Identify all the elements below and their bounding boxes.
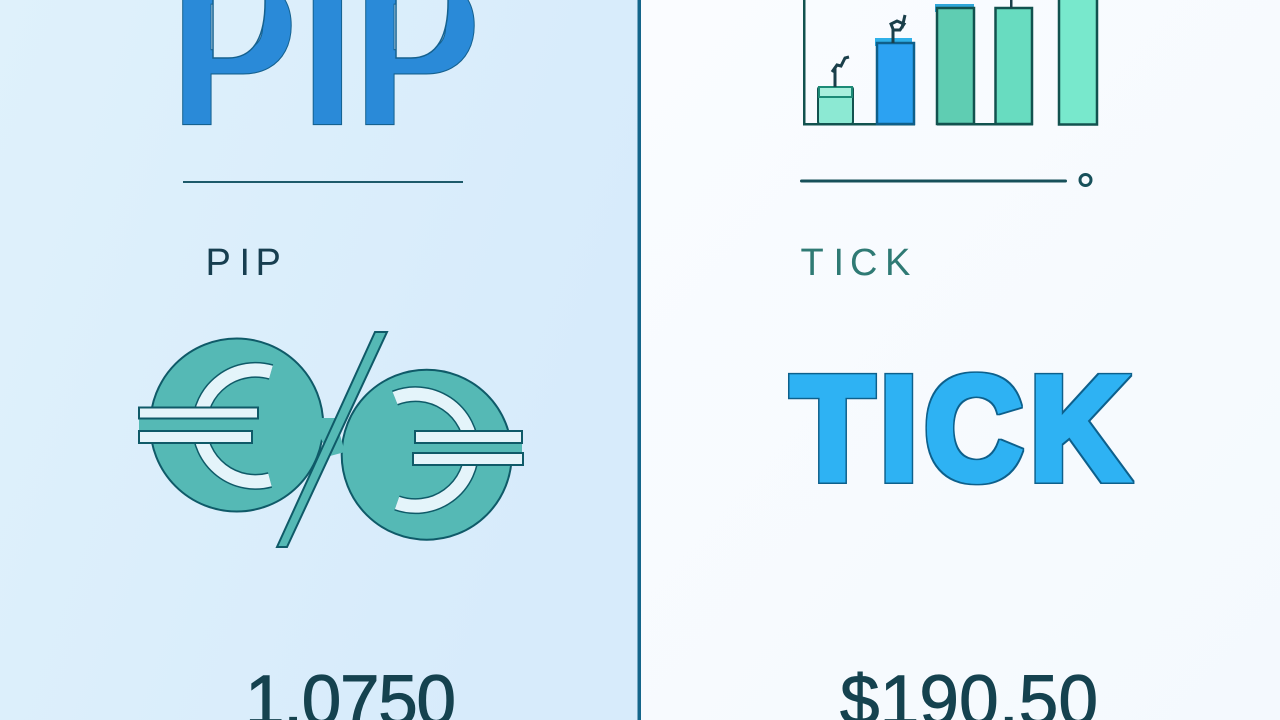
tick divider line <box>800 180 1067 182</box>
bar 3 <box>935 4 974 124</box>
slash bar <box>277 332 387 547</box>
right euro arc <box>395 394 471 506</box>
panel: tick column <box>791 0 1128 720</box>
chart left axis <box>803 0 806 125</box>
bar 4 <box>996 0 1032 124</box>
second P counter <box>396 0 448 58</box>
right euro upper bar <box>415 431 522 443</box>
left euro coin <box>150 338 323 512</box>
right euro strip between bars <box>415 443 522 453</box>
panel: tick background <box>641 0 1280 720</box>
bar 1 <box>818 57 853 124</box>
left euro strip between bars <box>139 418 252 431</box>
large heading: TICK: TICK <box>791 346 1128 510</box>
chart baseline middle <box>937 123 1033 126</box>
left euro arc fill <box>200 370 271 482</box>
left euro arc <box>200 370 271 482</box>
panel: pip background <box>0 0 638 720</box>
left euro upper bar <box>139 408 258 418</box>
bar chart <box>803 0 1097 126</box>
bar 5 <box>1059 0 1097 124</box>
right euro arc fill <box>395 394 471 506</box>
panel: pip column <box>139 0 523 720</box>
coin junction <box>320 418 345 456</box>
center divider <box>638 0 641 720</box>
chart baseline <box>803 123 915 126</box>
icon: euro coins with slash <box>139 332 523 547</box>
label: PIP: PIP <box>206 242 281 284</box>
left euro lower bar <box>139 431 252 443</box>
right euro lower bar <box>413 453 523 465</box>
pip divider line <box>183 181 463 183</box>
right euro coin <box>342 370 512 540</box>
first P counter <box>213 0 265 58</box>
divider end dot <box>1080 174 1091 186</box>
label: TICK: TICK <box>800 242 910 284</box>
bar 2 <box>875 15 914 124</box>
